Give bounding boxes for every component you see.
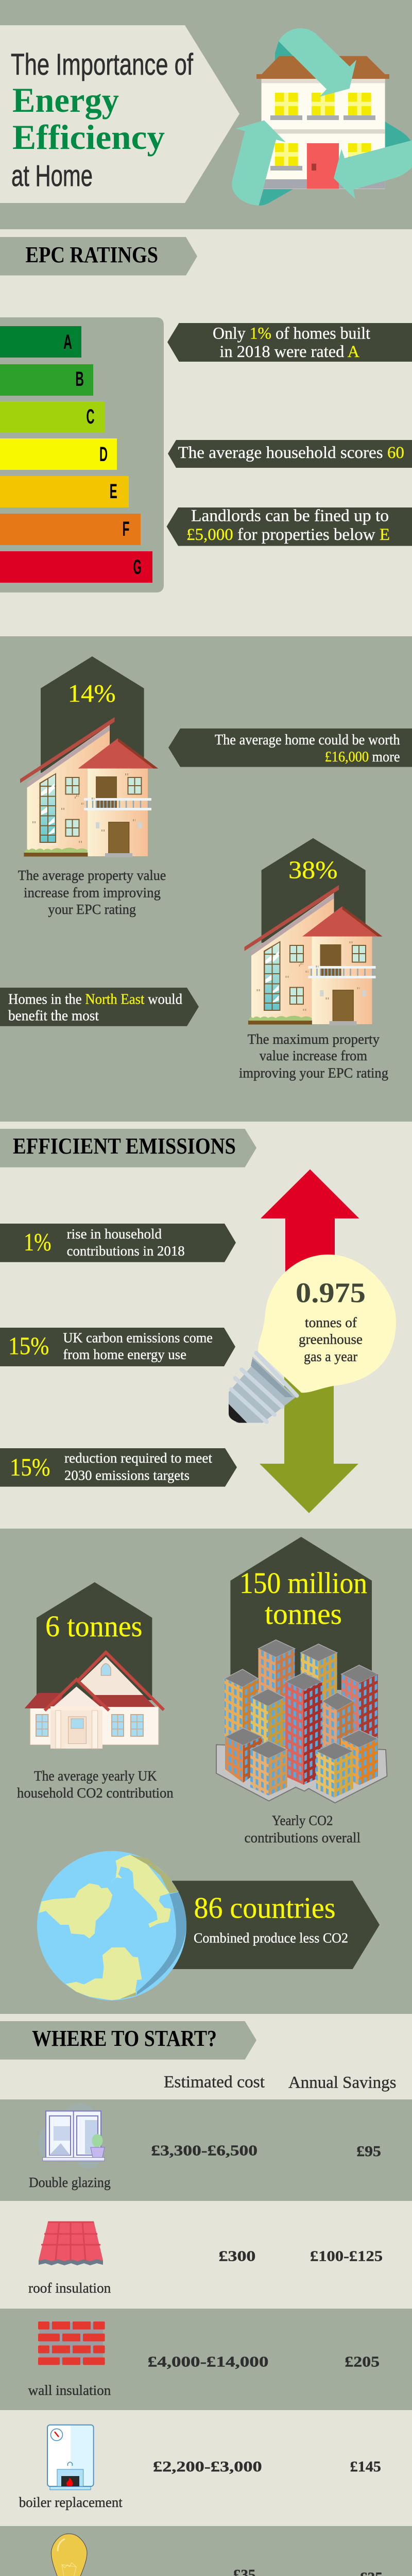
label: boiler replacement xyxy=(19,2495,123,2510)
icon: globe xyxy=(37,1851,186,2001)
bar A: A xyxy=(63,331,72,353)
text: average property value increase xyxy=(18,868,166,917)
text: household CO2 contribution xyxy=(17,1768,174,1801)
callout: £16,000 more: The average home could be worth xyxy=(215,732,400,748)
heading: Where to start: WHERE TO START? xyxy=(32,2026,217,2051)
stat: 38% house backdrop: 38% xyxy=(288,855,338,884)
text: maximum property value increase: improving your EPC rating xyxy=(239,1065,388,1081)
title line: Energy: Energy xyxy=(12,80,119,120)
annual savings: £145 xyxy=(350,2459,381,2475)
text: yearly CO2 contributions overall xyxy=(244,1813,360,1845)
stat caption xyxy=(299,1315,363,1364)
bar F xyxy=(0,514,141,545)
callout: 1% rated A: in 2018 were rated A xyxy=(219,343,359,361)
heading: EPC ratings xyxy=(0,237,197,276)
title line: at Home: at Home xyxy=(11,159,93,193)
heading: Efficient emissions xyxy=(0,1129,256,1167)
callout: 15% home energy: UK carbon emissions come xyxy=(63,1330,213,1346)
stat value: 0.975 xyxy=(296,1277,366,1308)
icon: boiler xyxy=(47,2425,94,2490)
bar A xyxy=(0,326,81,358)
title line: The Importance of: The Importance of xyxy=(11,48,194,81)
arrow: red up xyxy=(261,1170,359,1288)
stat caption: tonnes of xyxy=(305,1315,357,1330)
row: double glazing xyxy=(29,2103,381,2190)
callout: 15% reduction: 2030 emissions targets xyxy=(64,1468,190,1483)
callout: 1% rise: contributions in 2018 xyxy=(67,1243,185,1259)
arrow: green down xyxy=(260,1376,358,1513)
title line: Efficiency: Efficiency xyxy=(12,117,165,157)
label: Double glazing xyxy=(29,2175,111,2190)
row: low-energy lights xyxy=(23,2534,383,2576)
text: household CO2 contribution: household CO2 contribution xyxy=(17,1785,174,1801)
callout: 15% reduction xyxy=(0,1448,237,1487)
callout: 1% rated A xyxy=(167,323,412,362)
callout: 15% reduction: reduction required to meet xyxy=(64,1450,212,1466)
bar B: B xyxy=(75,368,84,391)
bar F: F xyxy=(123,518,130,540)
text: average property value increase: increase from improving xyxy=(24,885,161,901)
bar E xyxy=(0,476,129,507)
callout: £16,000 more: £16,000 more xyxy=(325,749,400,765)
text: average property value increase: The average property value xyxy=(18,868,166,883)
callout: 1% rise: 1% xyxy=(24,1228,52,1256)
stat caption: gas a year xyxy=(304,1349,357,1364)
callout: 1% rise xyxy=(0,1224,236,1262)
callout: £16,000 more xyxy=(168,728,412,767)
stat caption: greenhouse xyxy=(299,1332,363,1347)
icon: two-storey house repeat xyxy=(244,885,382,1025)
text: maximum property value increase: The maximum property xyxy=(248,1031,380,1047)
callout: 1% rated A: Only 1% of homes built xyxy=(213,324,370,343)
callout: North East: benefit the most xyxy=(8,1008,99,1024)
estimated cost: £3,300-£6,500 xyxy=(151,2143,258,2159)
heading: Efficient emissions: EFFICIENT EMISSIONS xyxy=(13,1133,236,1159)
callout: landlord fines: Landlords can be fined up to xyxy=(191,506,389,525)
text: maximum property value increase: value increase from xyxy=(260,1048,367,1063)
estimated cost: £300 xyxy=(218,2248,255,2265)
callout: 15% home energy: 15% xyxy=(8,1331,49,1360)
stat: 150 million tonnes backdrop: 150 million xyxy=(239,1566,367,1600)
icon: city blocks xyxy=(216,1640,387,1803)
icon: bungalow xyxy=(25,1652,164,1749)
row: boiler replacement xyxy=(19,2425,381,2510)
bar B xyxy=(0,364,93,396)
callout: 86 countries xyxy=(172,1880,380,1969)
bar C xyxy=(0,401,105,433)
row: roof insulation xyxy=(28,2222,383,2296)
text: maximum property value increase xyxy=(239,1031,388,1081)
callout: North East: Homes in the North East would xyxy=(8,991,182,1008)
callout: 15% reduction: 15% xyxy=(10,1453,50,1481)
callout: 15% home energy xyxy=(0,1328,235,1366)
estimated cost: £4,000-£14,000 xyxy=(148,2353,268,2370)
bar E: E xyxy=(110,480,117,503)
text: yearly CO2 contributions overall: Yearly CO2 xyxy=(272,1813,333,1828)
heading: EPC ratings: EPC RATINGS xyxy=(26,242,158,267)
label: wall insulation xyxy=(28,2382,111,2398)
icon: house with recycling arrows xyxy=(232,28,412,206)
text: average property value increase: your EPC rating xyxy=(48,902,136,917)
stat: 150 million tonnes backdrop xyxy=(230,1537,372,1690)
icon: yellow bulb xyxy=(52,2534,87,2576)
column heading: Estimated cost: Estimated cost xyxy=(164,2073,265,2092)
stat: 14% house backdrop xyxy=(41,656,144,773)
icon: two-storey house xyxy=(20,717,158,857)
label: roof insulation xyxy=(28,2280,111,2296)
stat: 150 million tonnes backdrop: tonnes xyxy=(265,1597,342,1631)
callout: 86 countries: 86 countries xyxy=(194,1891,336,1925)
callout: landlord fines: £5,000 for properties below E xyxy=(186,526,390,544)
panel: EPC rating bars xyxy=(0,317,164,592)
column heading: Annual Savings: Annual Savings xyxy=(288,2074,396,2092)
callout: average score 60 xyxy=(168,440,412,468)
estimated cost: £2,200-£3,000 xyxy=(153,2459,262,2475)
stat: 14% house backdrop: 14% xyxy=(68,679,116,707)
text: household CO2 contribution: The average yearly UK xyxy=(34,1768,157,1784)
callout: 1% rise: rise in household xyxy=(67,1226,162,1242)
icon: bricks xyxy=(38,2321,105,2365)
callout: 15% home energy: from home energy use xyxy=(63,1347,186,1362)
callout: North East xyxy=(0,988,199,1026)
stat: 6 tonnes backdrop: 6 tonnes xyxy=(45,1609,142,1643)
bar C: C xyxy=(87,405,95,428)
row: wall insulation xyxy=(28,2321,380,2398)
bar G: G xyxy=(133,556,142,579)
callout: landlord fines xyxy=(167,506,412,546)
stat: 38% house backdrop xyxy=(262,838,366,943)
heading: Where to start xyxy=(0,2021,256,2060)
bar D: D xyxy=(99,443,108,466)
callout: 86 countries: Combined produce less CO2 xyxy=(194,1930,348,1945)
stat: 6 tonnes backdrop xyxy=(37,1582,152,1700)
title banner xyxy=(0,25,239,203)
callout: average score 60: The average household scores 60 xyxy=(178,444,404,462)
bar G xyxy=(0,551,152,583)
annual savings: £100-£125 xyxy=(310,2248,383,2265)
annual savings: £95 xyxy=(356,2143,381,2160)
icon: window xyxy=(38,2103,105,2169)
bar D xyxy=(0,438,117,470)
text: yearly CO2 contributions overall: contributions overall xyxy=(244,1830,360,1845)
icon: roof tiles xyxy=(39,2222,103,2265)
annual savings: £205 xyxy=(345,2353,380,2370)
icon: light bulb with 0.975 stat xyxy=(229,1255,396,1423)
